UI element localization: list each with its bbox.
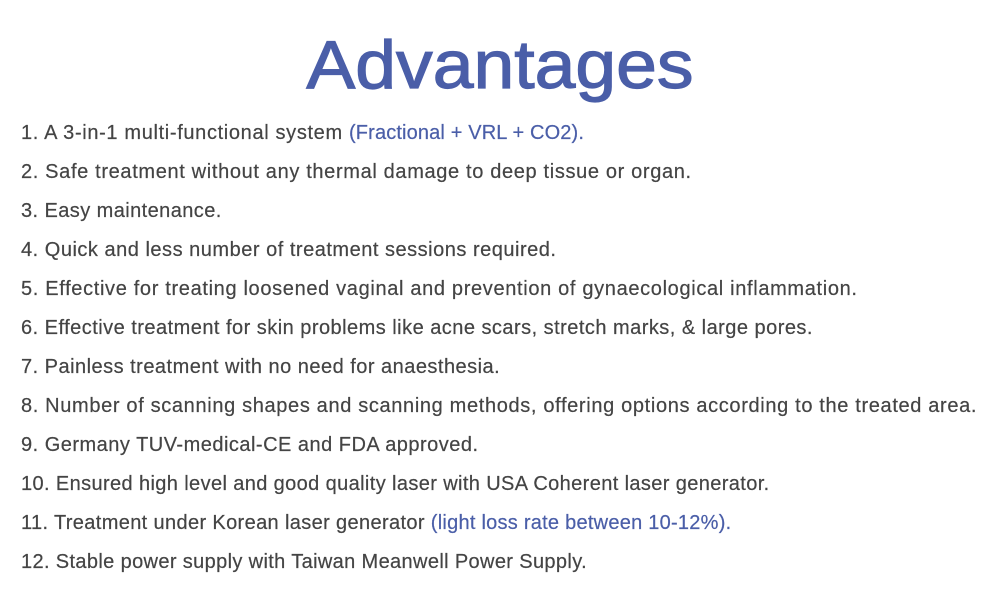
item 7: 7. Painless treatment with no need for anaesthesia.	[21, 356, 500, 378]
item 1: 1. A 3-in-1 multi-functional system (Fractional + VRL + CO2).	[21, 122, 584, 144]
item 12: 12. Stable power supply with Taiwan Meanwell Power Supply.	[21, 551, 587, 573]
item 11: 11. Treatment under Korean laser generator (light loss rate between 10-12%).	[21, 512, 731, 534]
title: Advantages	[306, 27, 694, 103]
item 3: 3. Easy maintenance.	[21, 200, 222, 222]
item 10: 10. Ensured high level and good quality laser with USA Coherent laser generator.	[21, 473, 770, 495]
item 6: 6. Effective treatment for skin problems like acne scars, stretch marks, & large pores.	[21, 317, 813, 339]
item 4: 4. Quick and less number of treatment sessions required.	[21, 239, 556, 261]
item 9: 9. Germany TUV-medical-CE and FDA approved.	[21, 434, 479, 456]
item 2: 2. Safe treatment without any thermal damage to deep tissue or organ.	[21, 161, 692, 183]
item 5: 5. Effective for treating loosened vaginal and prevention of gynaecological inflammation.	[21, 278, 858, 300]
item 8: 8. Number of scanning shapes and scanning methods, offering options according to the treated area.	[21, 395, 977, 417]
